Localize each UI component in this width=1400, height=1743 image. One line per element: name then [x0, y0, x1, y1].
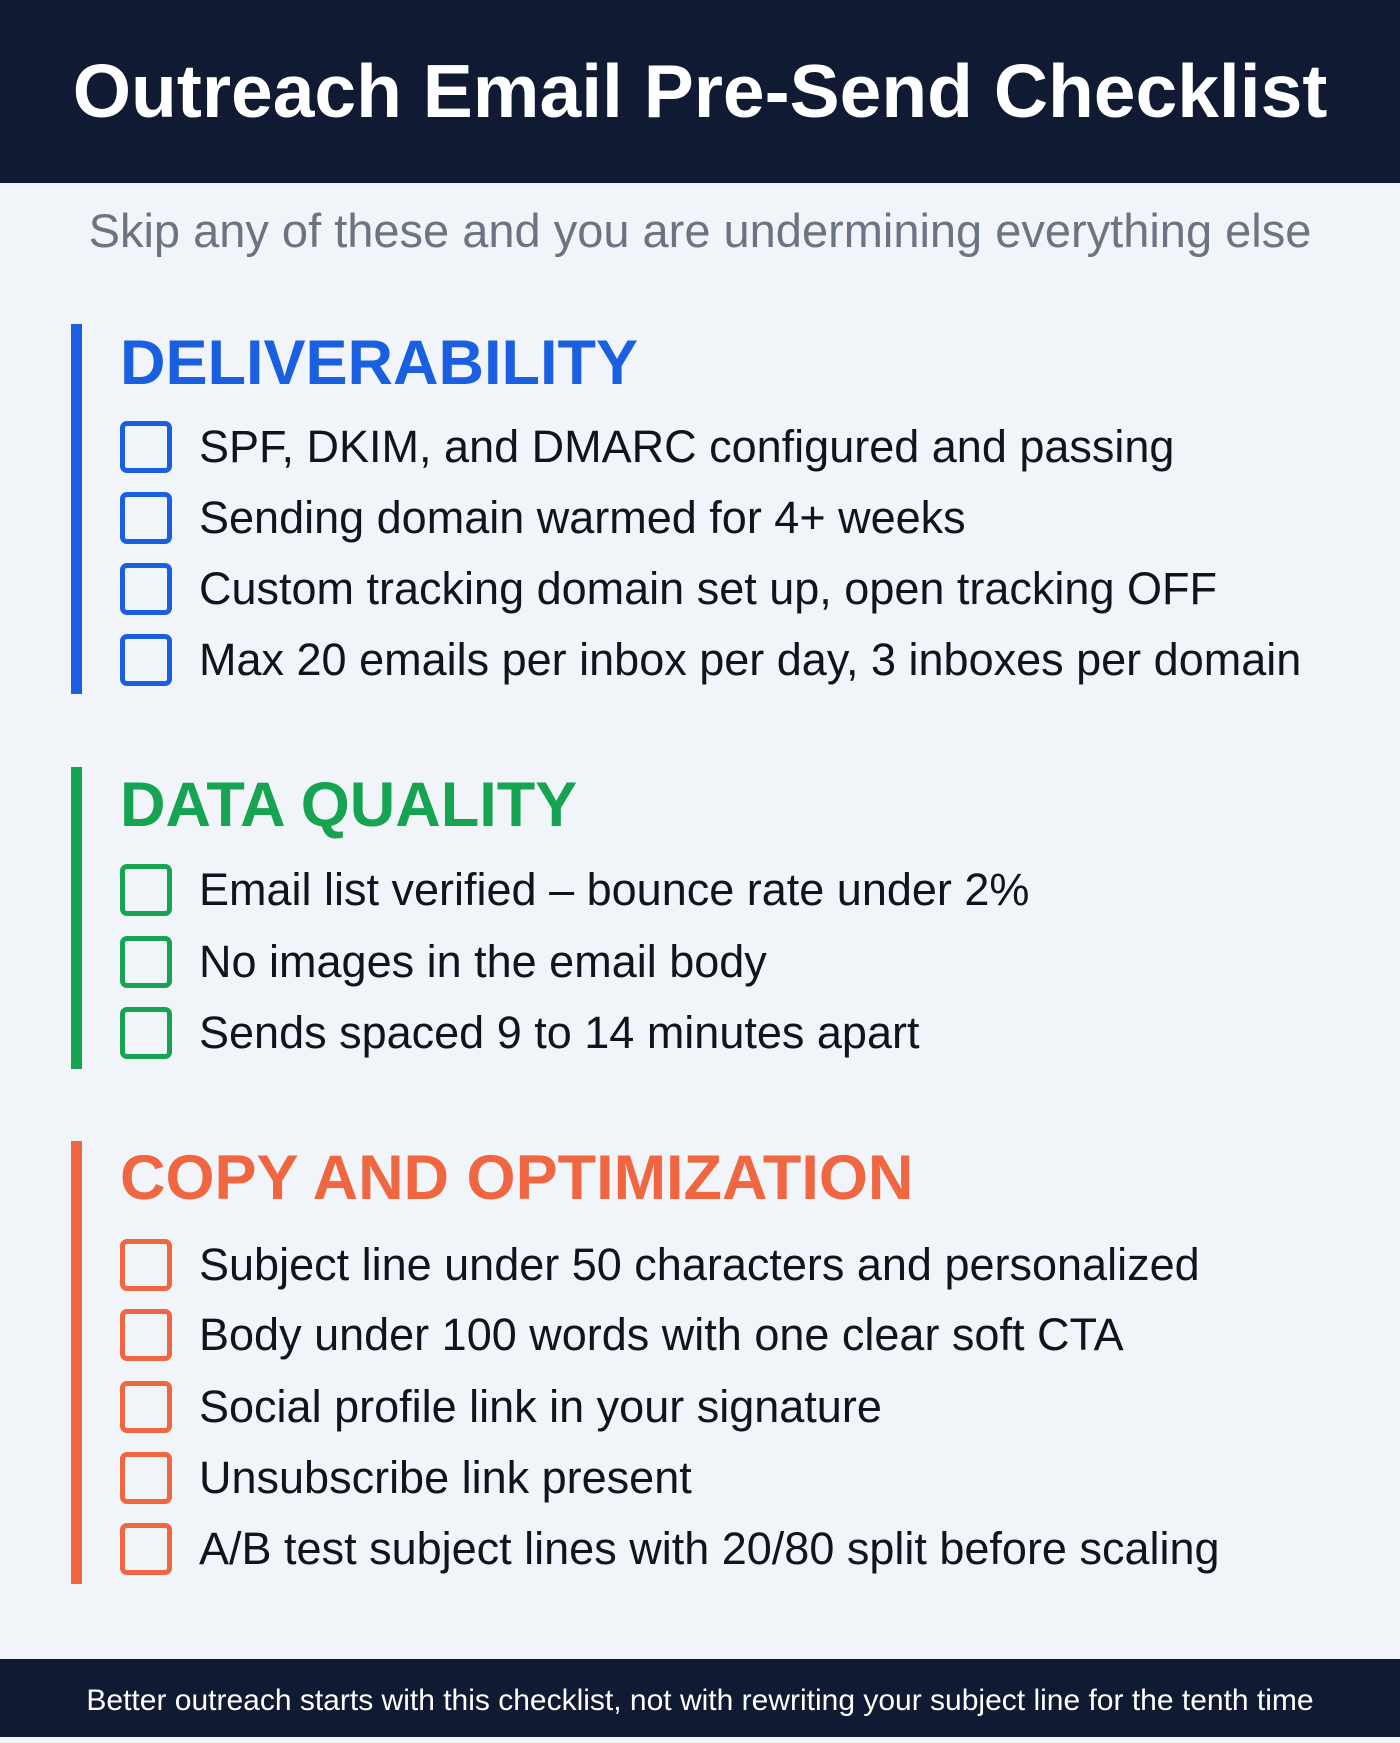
item: SPF: SPF, DKIM, and DMARC configured and passing — [199, 421, 1174, 472]
item: no images: No images in the email body — [199, 936, 767, 987]
item: max emails: Max 20 emails per inbox per day, 3 inboxes per domain — [199, 634, 1301, 685]
panel: data quality — [71, 767, 1029, 1069]
item: unsubscribe: Unsubscribe link present — [199, 1452, 692, 1503]
footer band — [0, 1659, 1400, 1737]
heading: deliverability: DELIVERABILITY — [120, 328, 638, 398]
item: subject: Subject line under 50 characters and personalized — [199, 1239, 1200, 1290]
item: body: Body under 100 words with one clear soft CTA — [199, 1309, 1124, 1360]
item: spacing: Sends spaced 9 to 14 minutes apart — [199, 1007, 919, 1058]
item: social: Social profile link in your signature — [199, 1381, 882, 1432]
item: tracking: Custom tracking domain set up, open tracking OFF — [199, 563, 1217, 614]
panel: copy and optimization — [71, 1141, 1220, 1584]
heading: data quality: DATA QUALITY — [120, 770, 577, 840]
title: Outreach Email Pre-Send Checklist — [73, 49, 1327, 133]
item: ab test: A/B test subject lines with 20/80 split before scaling — [199, 1523, 1220, 1574]
heading: copy and optimization: COPY AND OPTIMIZATION — [120, 1143, 913, 1213]
footer text: Better outreach starts with this checklist, not with rewriting your subject line for the tenth time — [86, 1684, 1314, 1717]
item: warmed: Sending domain warmed for 4+ weeks — [199, 492, 966, 543]
subtitle: Skip any of these and you are undermining everything else — [89, 204, 1311, 257]
panel: deliverability — [71, 324, 1301, 694]
item: verified: Email list verified – bounce rate under 2% — [199, 864, 1029, 915]
header band — [0, 0, 1400, 183]
